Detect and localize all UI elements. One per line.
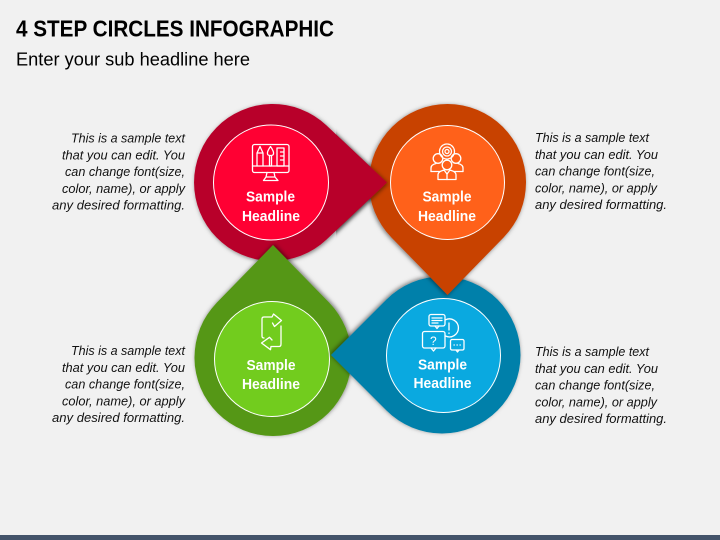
green inner circle (214, 302, 330, 416)
orange teardrop (369, 104, 526, 295)
orange headline: Headline (418, 209, 476, 225)
blue headline: Headline (414, 376, 472, 392)
text block: bottom right: can change font(size, (535, 378, 655, 392)
text block: bottom right: any desired formatting. (535, 412, 667, 426)
icon: chat bubbles: ? (430, 334, 437, 348)
panel: step 2 orange (369, 104, 526, 295)
text block: top right: This is a sample text (535, 131, 650, 145)
text block: bottom left: color, name), or apply (62, 394, 186, 408)
panel: step 3 green (194, 245, 352, 436)
text block: top left: This is a sample text (71, 132, 186, 146)
text block: bottom left: This is a sample text (71, 344, 186, 358)
orange inner circle (390, 126, 504, 240)
blue teardrop (331, 276, 521, 434)
green headline: Headline (242, 377, 300, 393)
title: 4 STEP CIRCLES INFOGRAPHIC (16, 16, 334, 42)
text block: top right: that you can edit. You (535, 148, 658, 162)
red inner circle (214, 125, 328, 240)
text block: top left: can change font(size, (65, 165, 185, 179)
blue inner circle (386, 298, 500, 412)
text block: bottom left: that you can edit. You (62, 361, 185, 375)
text block: bottom right: that you can edit. You (535, 362, 658, 376)
orange headline: Sample (422, 190, 472, 206)
text block: top left: any desired formatting. (52, 198, 185, 212)
text block: top right: any desired formatting. (535, 198, 667, 212)
icon: monitor with design tools (252, 144, 289, 180)
icon: team with gear (431, 144, 463, 180)
text block: bottom left: can change font(size, (65, 378, 185, 392)
text block: top right: can change font(size, (535, 164, 655, 178)
footer bar (0, 535, 720, 540)
blue headline: Sample (418, 358, 467, 374)
text block: bottom right: This is a sample text (535, 345, 650, 359)
text block: top left: that you can edit. You (62, 148, 185, 162)
subtitle: Enter your sub headline here (16, 50, 250, 70)
red teardrop (194, 104, 387, 261)
red headline: Headline (242, 209, 300, 225)
green teardrop (194, 245, 352, 436)
icon: chat bubbles (422, 314, 464, 352)
panel: step 1 red (194, 104, 387, 261)
text block: top left: color, name), or apply (62, 182, 186, 196)
text block: bottom right: color, name), or apply (535, 396, 658, 410)
red tip overlapping orange (336, 130, 390, 236)
text block: top right: color, name), or apply (535, 182, 658, 196)
green headline: Sample (246, 358, 296, 374)
panel: step 4 blue (331, 276, 521, 434)
text block: bottom left: any desired formatting. (52, 411, 185, 425)
red headline: Sample (246, 190, 295, 206)
icon: repeat arrows (262, 314, 282, 350)
